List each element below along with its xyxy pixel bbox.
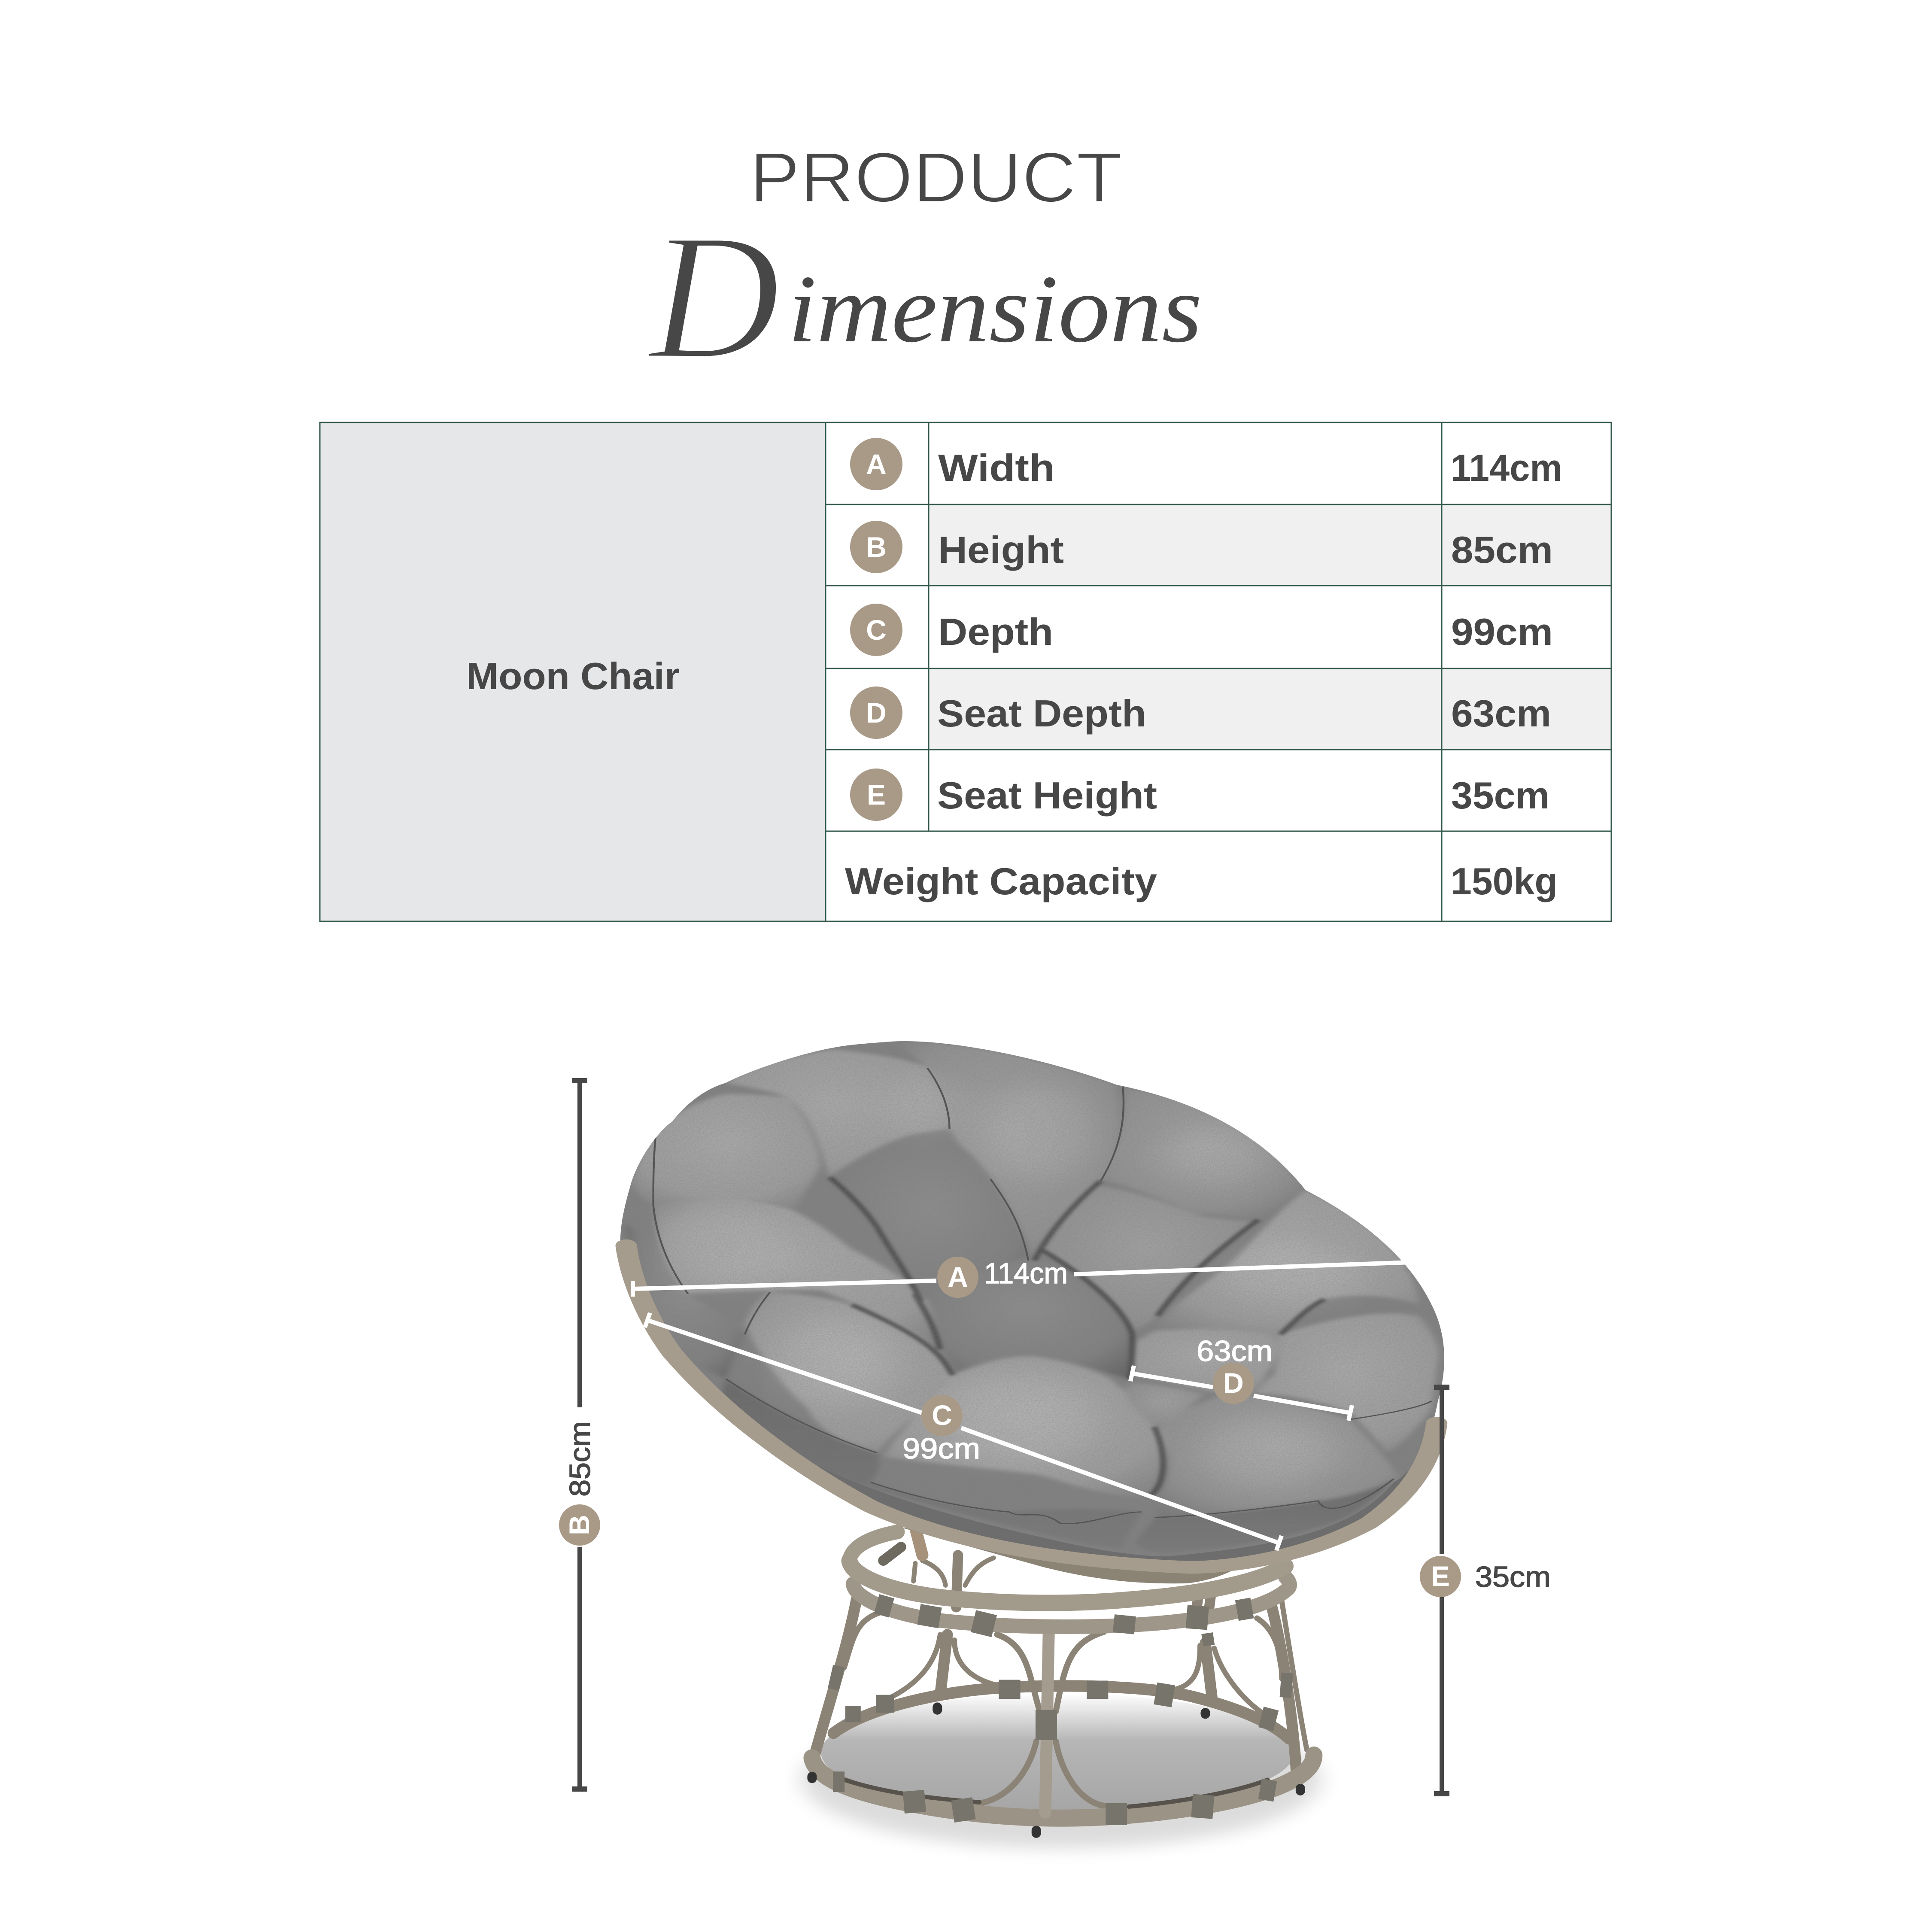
- row A: Width: A: [866, 448, 887, 480]
- row B: Height: 85cm: [1451, 529, 1553, 571]
- title: PRODUCT: PRODUCT: [750, 138, 1122, 217]
- chair seat: frame ring: [626, 1245, 1437, 1567]
- badge C: [921, 1395, 963, 1436]
- badge A: A: [948, 1261, 968, 1293]
- row C: Depth: [850, 604, 1553, 656]
- chair base: [802, 1528, 1321, 1848]
- row E: Seat Height: [850, 769, 1549, 821]
- badge A: [937, 1257, 978, 1298]
- dimension line E: 35cm: [1420, 1387, 1551, 1794]
- chair seat: cushion: [600, 1031, 1463, 1564]
- badge D: [1213, 1363, 1254, 1404]
- cushion soft highlights: [683, 1091, 1343, 1480]
- row D: Seat Depth: Seat Depth: [937, 692, 1146, 735]
- label: 35cm: 35cm: [1475, 1561, 1551, 1593]
- chair seat: under bowl: [901, 1528, 1245, 1583]
- chair seat: cushion underside: [626, 1245, 1437, 1567]
- title: [646, 138, 1202, 396]
- row B: Height: [850, 521, 1553, 573]
- badge B: B: [563, 1515, 595, 1535]
- table grid: [320, 422, 1611, 921]
- row D: Seat Depth: D: [866, 697, 887, 729]
- badge B: [559, 1504, 600, 1546]
- row D: Seat Depth: [850, 687, 1551, 739]
- row C: Depth: 99cm: [1451, 611, 1553, 653]
- row E: Seat Height: Seat Height: [937, 774, 1157, 817]
- title: Dimensions script: D: [646, 197, 780, 396]
- row E: Seat Height: E: [867, 779, 886, 811]
- cushion seams: [653, 1068, 1432, 1524]
- row B: Height: B: [866, 531, 887, 563]
- title: Dimensions script: imensions: [788, 255, 1202, 362]
- cushion crease shadows: [830, 1177, 1324, 1497]
- label: Moon Chair: Moon Chair: [466, 655, 680, 697]
- specification table: [320, 422, 1611, 921]
- row B: Height: Height: [938, 529, 1064, 571]
- label: 99cm: 99cm: [902, 1432, 980, 1465]
- panel: Moon Chair: [320, 422, 826, 921]
- row: Weight Capacity: [845, 860, 1558, 902]
- label: 114cm: 114cm: [984, 1257, 1068, 1290]
- row D: Seat Depth: 63cm: [1451, 692, 1551, 735]
- label: 85cm: 85cm: [564, 1421, 596, 1497]
- dimension line D: 63cm: [1130, 1335, 1352, 1421]
- dimension line B: 85cm: [559, 1081, 600, 1789]
- cushion fabric texture: [600, 1031, 1463, 1564]
- row C: Depth: Depth: [938, 611, 1053, 653]
- badge E: E: [1431, 1560, 1450, 1592]
- dimension line A: 114cm: [633, 1257, 1412, 1298]
- dimension line C: 99cm: [645, 1313, 1282, 1550]
- badge E: [1420, 1556, 1461, 1597]
- row shading: Seat Depth: [929, 668, 1611, 750]
- row: Weight Capacity: 150kg: [1451, 860, 1558, 902]
- row E: Seat Height: 35cm: [1451, 774, 1549, 817]
- badge C: C: [932, 1399, 952, 1431]
- row: Weight Capacity: Weight Capacity: [845, 860, 1157, 902]
- row A: Width: 114cm: [1451, 447, 1562, 489]
- row C: Depth: C: [866, 614, 887, 646]
- badge D: D: [1223, 1367, 1244, 1399]
- row shading: Height: [929, 504, 1611, 586]
- row A: Width: Width: [938, 447, 1055, 489]
- row A: Width: [850, 438, 1562, 490]
- label: 63cm: 63cm: [1197, 1335, 1273, 1367]
